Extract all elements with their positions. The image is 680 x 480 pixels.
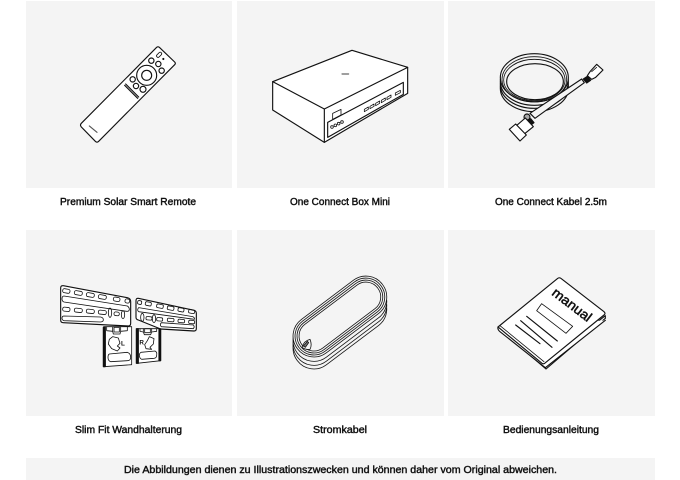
label: manual: Bedienungsanleitung <box>503 425 599 436</box>
footer note <box>26 458 655 480</box>
icon: manual booklet: manual <box>549 285 595 325</box>
icon: solar smart remote <box>80 47 175 142</box>
panel: power cable <box>237 230 444 416</box>
panel: box <box>237 1 444 188</box>
label: remote: Premium Solar Smart Remote <box>60 197 196 208</box>
right bracket plate: R <box>139 340 144 347</box>
panel: remote <box>26 1 232 188</box>
right bracket arm <box>136 298 196 331</box>
icon: manual booklet <box>498 278 605 369</box>
icon: coiled power cable <box>285 268 395 377</box>
label: wall mount: Slim Fit Wandhalterung <box>75 425 182 436</box>
icon: slim fit wall mount <box>61 286 196 367</box>
footer note: Die Abbildungen dienen zu Illustrationszwecken und können daher vom Original abweichen. <box>124 465 557 476</box>
icon: one connect cable <box>500 54 603 141</box>
label: box: One Connect Box Mini <box>290 197 390 208</box>
panel: manual <box>448 230 655 416</box>
label: power cable: Stromkabel <box>313 425 367 436</box>
panel: wall mount <box>26 230 232 416</box>
label: cable: One Connect Kabel 2.5m <box>495 197 607 208</box>
panel: cable <box>448 1 655 188</box>
left bracket arm <box>61 286 131 326</box>
left bracket plate: L <box>121 340 125 347</box>
icon: one connect box <box>273 50 408 142</box>
